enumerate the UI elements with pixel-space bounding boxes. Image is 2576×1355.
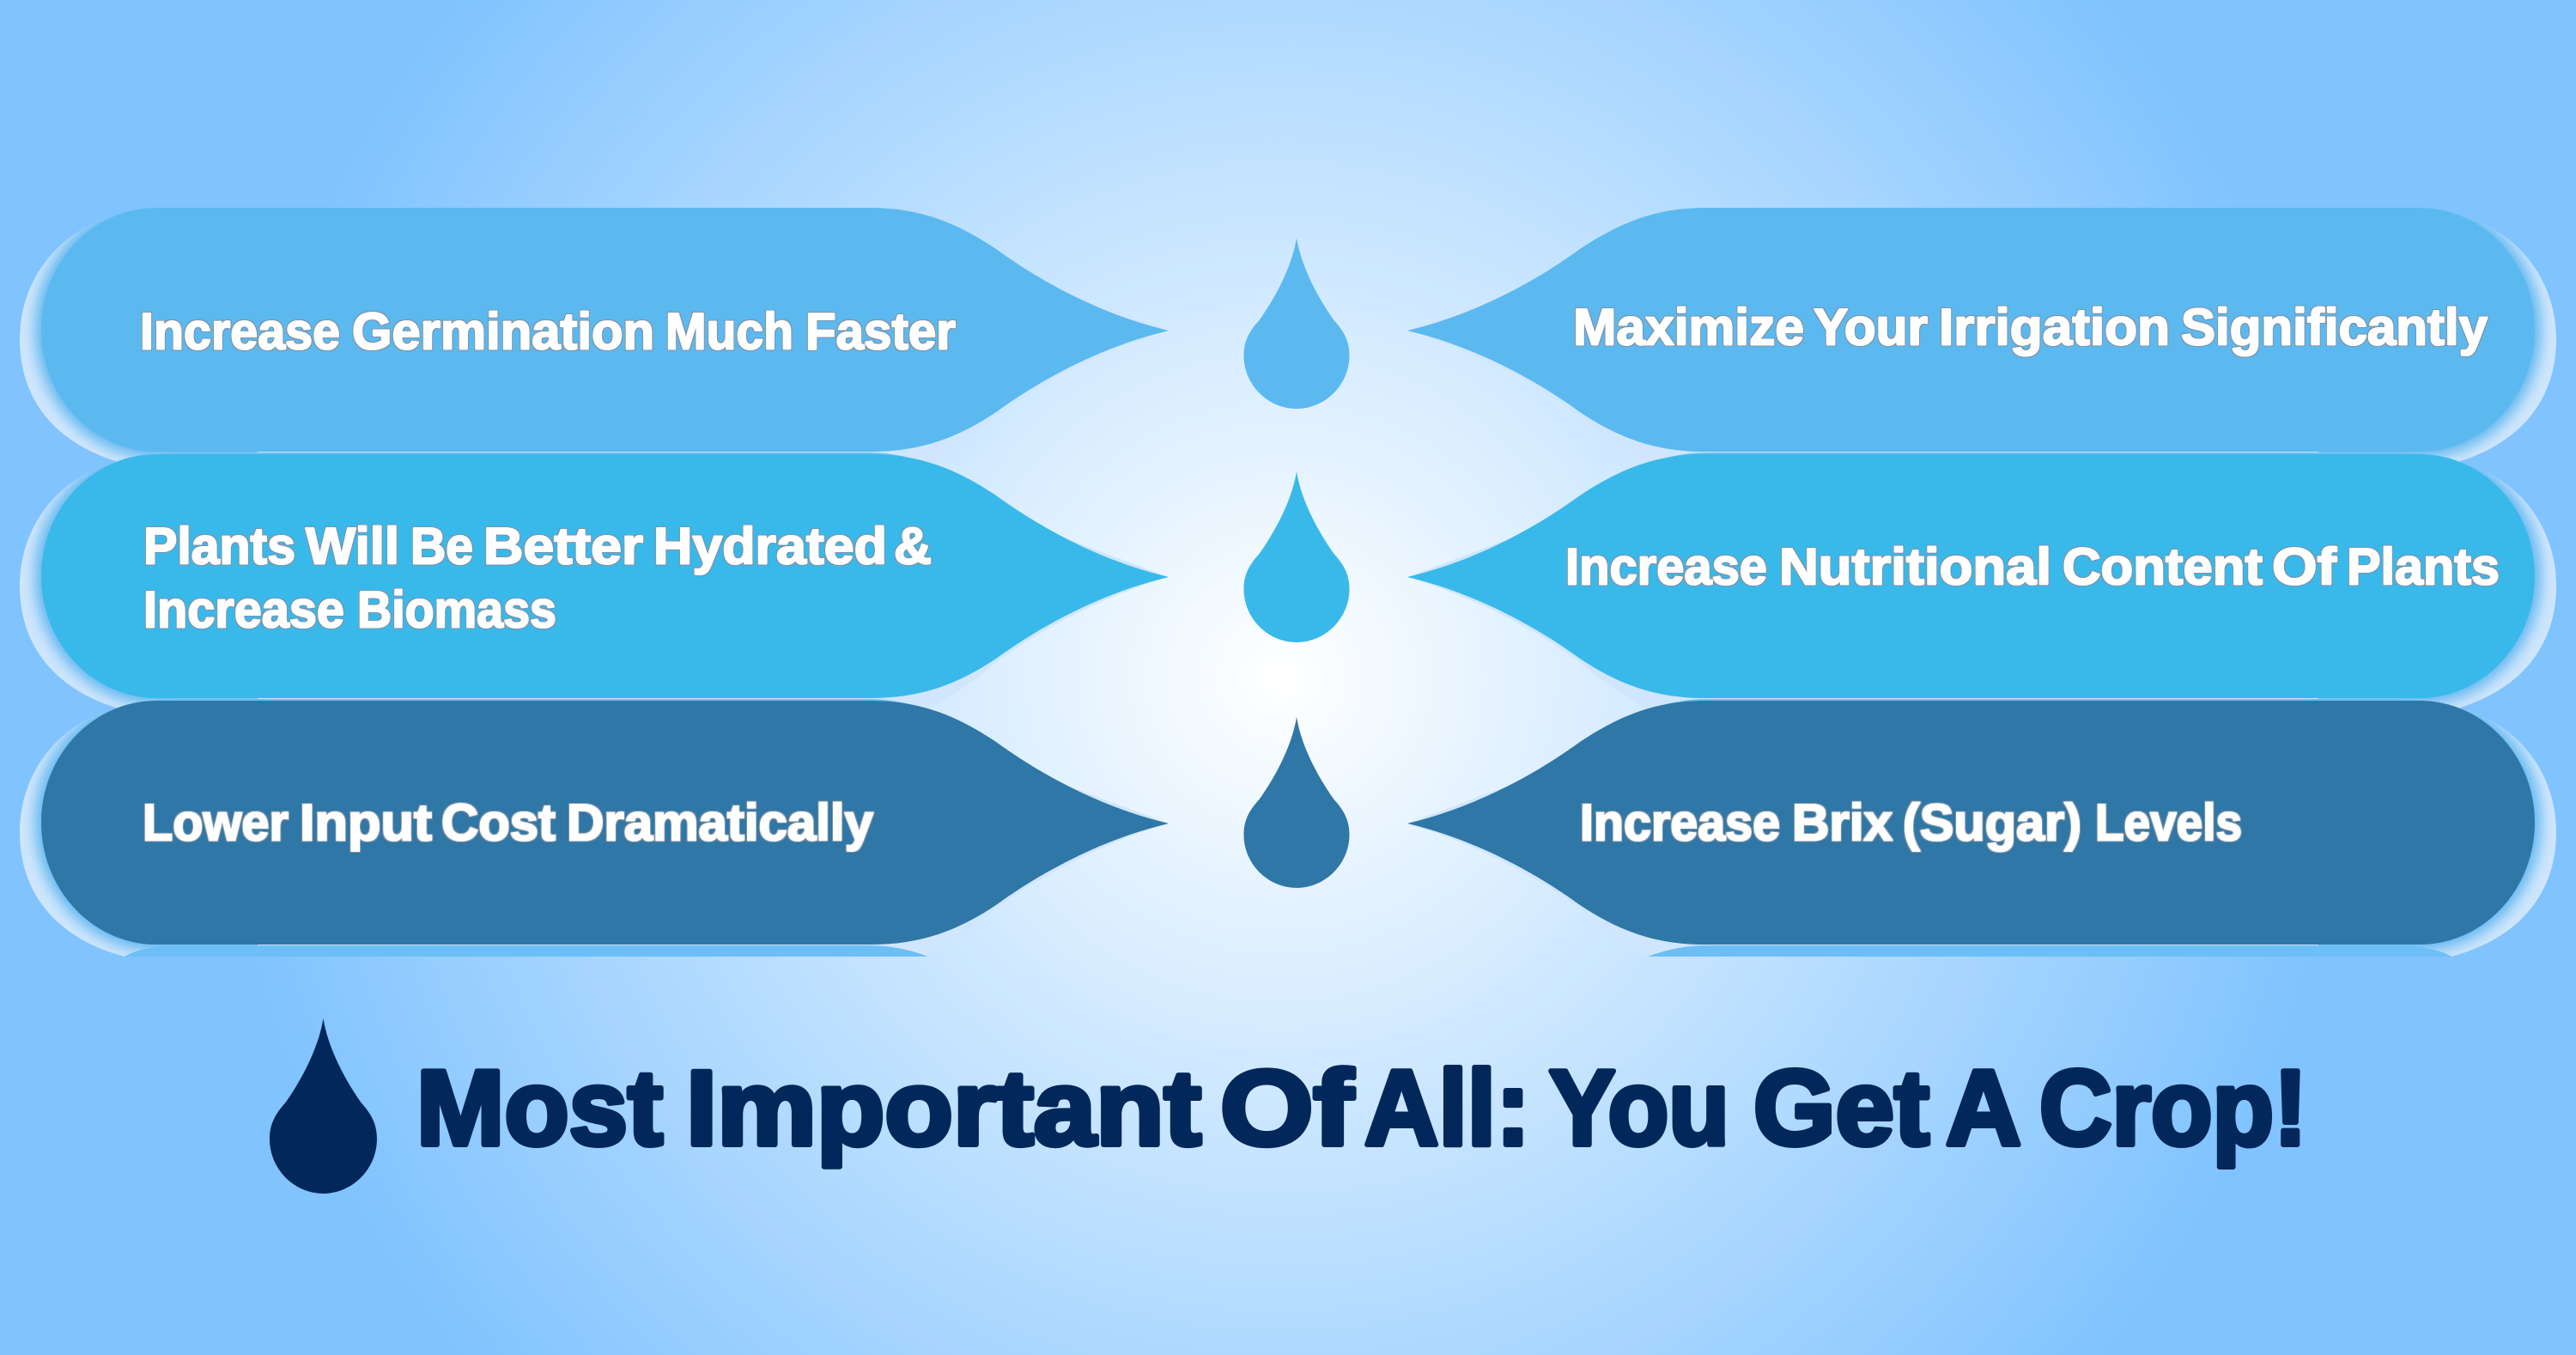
left pill 3: input cost: Cost: [441, 793, 556, 852]
left pill 1: germination: Much: [665, 302, 793, 361]
headline: [416, 1049, 2307, 1168]
headline: Important: [686, 1049, 1201, 1168]
icon: water drop 1: [1243, 238, 1350, 409]
headline: Crop!: [2039, 1049, 2307, 1168]
left pill 2: hydration and biomass: Better: [483, 517, 643, 575]
right pill 2: nutrition: Content: [2063, 538, 2263, 596]
right pill 3: brix: Increase: [1580, 793, 1780, 852]
right pill 3: brix: Levels: [2095, 793, 2242, 852]
right pill 2: nutrition: Of: [2272, 538, 2337, 596]
right pill 1: irrigation: Maximize: [1573, 299, 1804, 355]
left pill 2: hydration and biomass: Biomass: [357, 580, 556, 639]
icon: water drop 3: [1243, 717, 1350, 888]
left pill 3: input cost: [20, 701, 1169, 957]
left pill 3: input cost: Lower: [143, 793, 289, 852]
left pill 2: hydration and biomass: [20, 454, 1169, 710]
right pill 1: irrigation: Your: [1814, 299, 1928, 355]
left pill 2: hydration and biomass: Increase: [143, 580, 344, 639]
headline: Of: [1220, 1049, 1354, 1168]
left pill 2: hydration and biomass: Hydrated: [653, 517, 887, 575]
left pill 2: hydration and biomass: Will: [306, 517, 399, 575]
left pill 1: germination: [20, 208, 1169, 464]
left pill 2: hydration and biomass: Be: [410, 517, 473, 575]
headline: Most: [416, 1049, 663, 1168]
right pill 2: nutrition: Plants: [2347, 538, 2500, 596]
right pill 1: irrigation: [1407, 208, 2556, 464]
icon: water drop 2: [1243, 471, 1350, 642]
right pill 3: brix: (Sugar): [1903, 793, 2081, 852]
icon: large navy water drop: [270, 1018, 377, 1194]
left pill 3: input cost: Dramatically: [567, 793, 874, 852]
headline: All:: [1364, 1049, 1530, 1168]
left pill 2: hydration and biomass: Plants: [143, 517, 295, 575]
right pill 3: brix: [1407, 701, 2556, 957]
headline: You: [1549, 1049, 1729, 1168]
right pill 2: nutrition: [1407, 454, 2556, 710]
right pill 3: brix: Brix: [1792, 793, 1893, 852]
left pill 3: input cost: Input: [300, 793, 432, 852]
right pill 1: irrigation: Irrigation: [1939, 299, 2170, 355]
right pill 2: nutrition: Increase: [1565, 538, 1767, 596]
left pill 1: germination: Faster: [805, 302, 956, 361]
left pill 2: hydration and biomass: &: [894, 517, 932, 575]
left pill 1: germination: Increase: [140, 302, 340, 361]
left pill 1: germination: Germination: [352, 302, 654, 361]
right pill 1: irrigation: Significantly: [2181, 299, 2488, 355]
headline: Get: [1753, 1049, 1929, 1168]
right pill 2: nutrition: Nutritional: [1779, 538, 2051, 596]
headline: A: [1946, 1049, 2021, 1168]
